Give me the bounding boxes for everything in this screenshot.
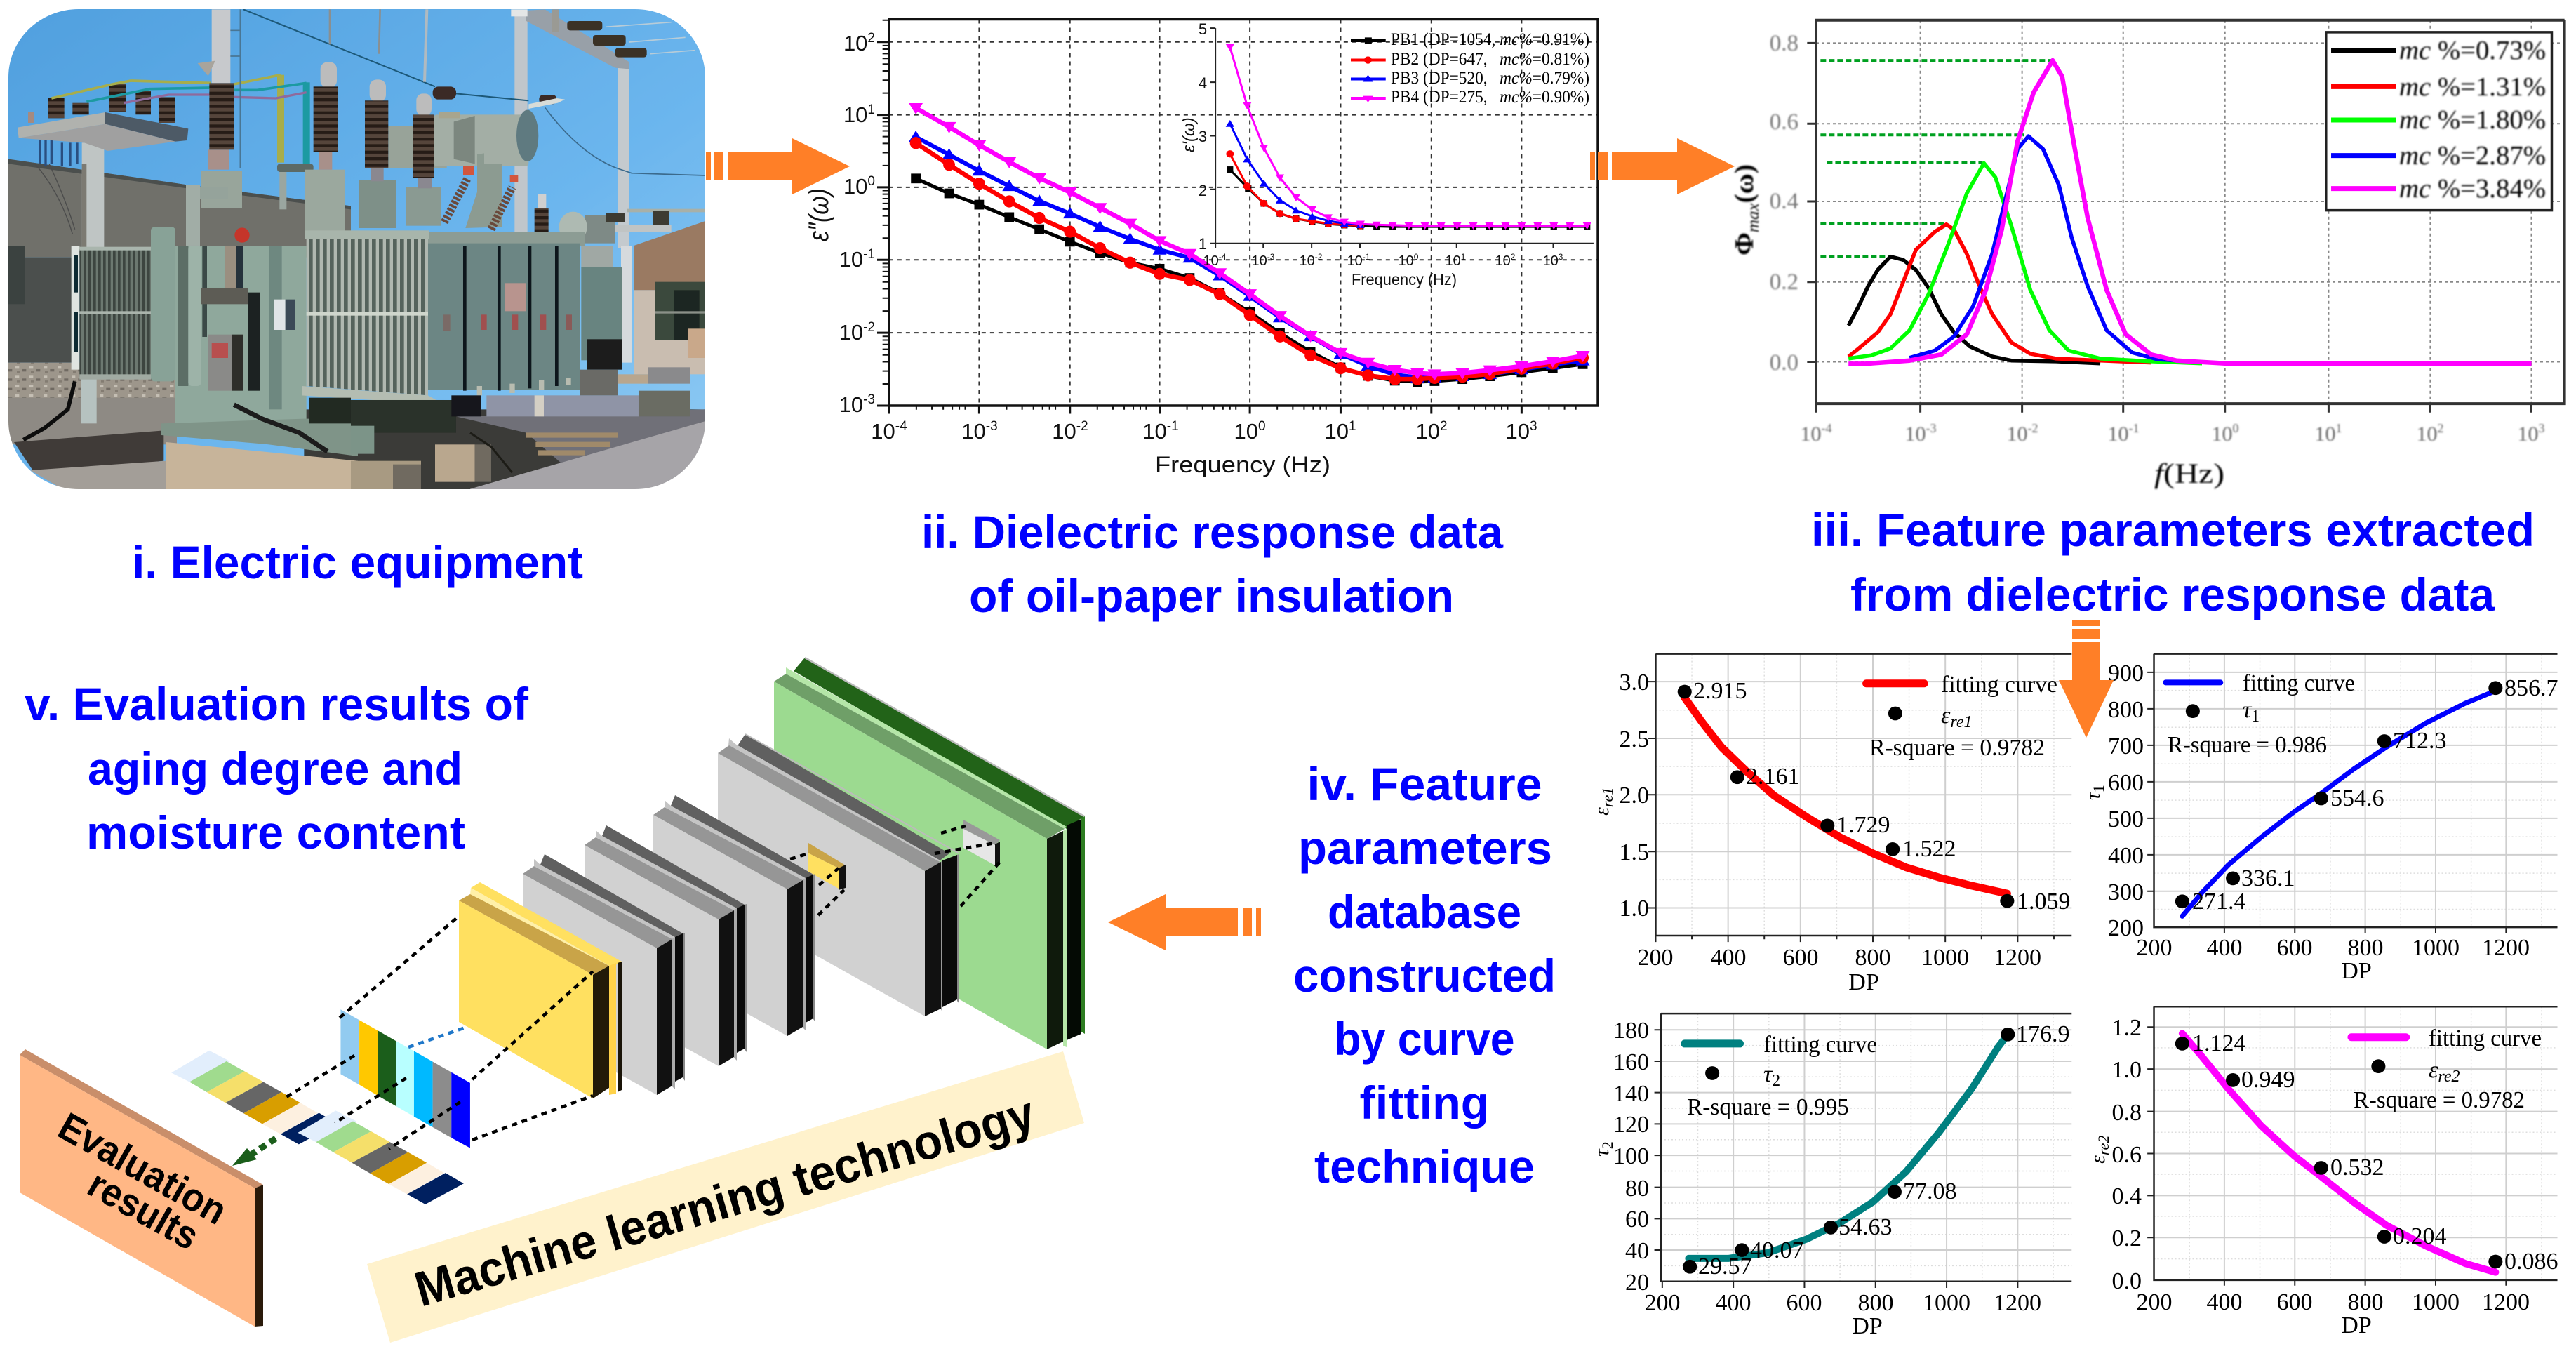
x ticks: 10 [2314, 423, 2335, 446]
chart: tau1 fit: 900 [2108, 660, 2144, 686]
radiators [72, 246, 79, 370]
inset legend: PB1 (DP=1054, mc%=0.91%) [1391, 30, 1589, 49]
chart: epsilon re1 fit: 200 [1638, 945, 1673, 971]
x ticks: 0 [2233, 421, 2238, 435]
chart: tau2 fit: 180 [1613, 1018, 1649, 1044]
chart: epsilon re2 fit [2086, 1006, 2558, 1338]
heading: iii. Feature parameters: iii. Feature parameters extracted [1811, 504, 2535, 556]
arrow: database to machine learning [1108, 894, 1261, 950]
chart: epsilon re2 fit: 0.2 [2112, 1225, 2142, 1251]
chart: tau1 fit: 856.7 [2504, 675, 2558, 701]
y axis ticks: -1 [863, 247, 875, 262]
chart: tau1 fit: 200 [2108, 915, 2144, 941]
chart: tau1 fit: 300 [2108, 879, 2144, 905]
heading: iv. Feature parameters database: constructed [1293, 950, 1556, 1002]
chart: feature parameters: f(Hz) [2154, 458, 2224, 489]
y axis ticks: 10 [839, 320, 863, 345]
chart: tau2 fit: 40 [1625, 1238, 1649, 1264]
chart: tau1 fit [2081, 654, 2558, 984]
chart: dielectric response: -4 [1219, 252, 1227, 262]
chart: dielectric response: Frequency (Hz) [1352, 270, 1457, 288]
chart: tau1 fit: DP [2341, 958, 2372, 984]
x axis ticks: 10 [871, 419, 895, 444]
chart: dielectric response: -2 [1315, 252, 1323, 262]
y ticks: 0.2 [1770, 270, 1798, 295]
chart: tau2 fit: 2 [1772, 1072, 1780, 1090]
chart: epsilon re1 fit: 400 [1711, 945, 1746, 971]
x ticks: 10 [2212, 423, 2233, 446]
heading: ii. Dielectric response data [921, 506, 1504, 622]
chart: dielectric response: 10 [1203, 253, 1219, 269]
chart: epsilon re2 fit: 600 [2276, 1289, 2313, 1315]
layer: gray plate 3 [653, 795, 815, 1036]
chart: epsilon re1 fit: 800 [1855, 945, 1890, 971]
photo: power transformer [0, 0, 711, 493]
chart: dielectric response: 0 [1414, 252, 1419, 262]
chart: epsilon re2 fit: 400 [2206, 1289, 2243, 1315]
arrow: network to evaluation results [232, 1138, 276, 1166]
chart: tau2 fit: R-square = 0.995 [1687, 1094, 1849, 1120]
y axis ticks: 0 [867, 174, 875, 189]
inset labels: 5 [1199, 20, 1207, 38]
chart: tau1 fit: 271.4 [2192, 889, 2245, 915]
chart: dielectric response: 10 [1446, 253, 1461, 269]
chart: dielectric response: ε′(ω) [1180, 117, 1199, 152]
chart: tau2 fit: 160 [1613, 1049, 1649, 1075]
chart: epsilon re2 fit: 0.532 [2330, 1155, 2384, 1181]
chart: dielectric response: 10 [1300, 253, 1315, 269]
chart: epsilon re2 fit: 0.204 [2393, 1223, 2446, 1249]
chart: tau1 fit: 800 [2348, 935, 2383, 961]
inset labels: 2 [1199, 182, 1207, 199]
chart: epsilon re1 fit: ε [1941, 703, 1950, 729]
diagram: neural network layers [171, 658, 1085, 1204]
chart: tau1 fit: 500 [2108, 806, 2144, 832]
heading: v. Evaluation results: v. Evaluation results of [25, 678, 529, 730]
x ticks: -1 [2129, 421, 2139, 435]
chart: epsilon re1 fit: fitting curve [1941, 672, 2057, 698]
legend labels [2399, 36, 2546, 204]
chart: epsilon re2 fit: R-square = 0.9782 [2354, 1087, 2525, 1113]
conservator [388, 126, 447, 168]
chart: tau1 fit: 800 [2108, 697, 2144, 723]
chart: tau2 fit: 29.57 [1698, 1254, 1751, 1279]
chart: tau2 fit: 54.63 [1838, 1214, 1892, 1240]
x ticks: 10 [2007, 423, 2028, 446]
legend labels: mc %=1.80% [2399, 105, 2546, 135]
chart: epsilon re2 fit: 1.124 [2192, 1030, 2245, 1056]
chart: epsilon re1 fit: 2.915 [1693, 678, 1747, 704]
banner: machine learning technology: Machine learning technology [408, 1085, 1041, 1317]
heading: iv. Feature parameters database: technique [1314, 1141, 1535, 1192]
chart: tau2 fit: 40.07 [1750, 1237, 1803, 1263]
chart: tau2 fit: 60 [1625, 1207, 1649, 1232]
chart: dielectric response: 10 [1399, 253, 1414, 269]
chart: epsilon re2 fit: 0.6 [2112, 1142, 2142, 1168]
y axis ticks: 10 [839, 392, 863, 417]
chart: epsilon re2 fit: ε [2086, 1155, 2109, 1164]
chart: tau2 fit: 140 [1613, 1081, 1649, 1107]
right small tank and bracket [585, 215, 615, 244]
inset labels: 4 [1199, 74, 1207, 92]
panel: evaluation results: results [81, 1162, 206, 1258]
x axis ticks: 0 [1258, 419, 1266, 434]
chart: epsilon re1 fit: 600 [1782, 945, 1819, 971]
chart: epsilon re2 fit: 0.4 [2112, 1183, 2142, 1209]
panel: evaluation results [20, 1049, 263, 1327]
chart: tau1 fit: 1000 [2412, 935, 2460, 961]
x ticks: 10 [2108, 423, 2129, 446]
dashed projection lines [283, 917, 593, 1149]
chart: feature parameters: max [1744, 203, 1763, 232]
x ticks: -4 [1822, 421, 1831, 435]
chart: tau2 fit: 1200 [1994, 1290, 2041, 1316]
chart: feature parameters [1730, 20, 2565, 489]
chart: tau1 fit: 1 [2090, 785, 2107, 792]
chart: epsilon re2 fit: re2 [2095, 1136, 2112, 1155]
chart: tau1 fit: 1200 [2482, 935, 2530, 961]
y ticks: 0.8 [1770, 31, 1798, 56]
x axis ticks: -1 [1167, 419, 1179, 434]
legend labels: mc %=0.73% [2399, 36, 2546, 65]
chart: tau1 fit: τ [2081, 792, 2104, 800]
colored wires [51, 75, 281, 98]
chart: tau1 fit: 400 [2206, 935, 2243, 961]
chart: tau2 fit: 800 [1858, 1290, 1893, 1316]
legend labels: mc %=3.84% [2399, 174, 2546, 204]
y axis ticks: 2 [867, 31, 875, 46]
chart: tau2 fit: DP [1852, 1313, 1883, 1339]
heading: iii. Feature parameters [1811, 504, 2535, 620]
chart: epsilon re1 fit: re1 [1950, 713, 1973, 731]
heading: v. Evaluation results [25, 678, 529, 858]
x axis ticks: 10 [961, 419, 986, 444]
chart: tau2 fit: 20 [1625, 1270, 1649, 1296]
left platform [82, 142, 104, 253]
chart: tau1 fit: 600 [2276, 935, 2313, 961]
chart: feature parameters: Φ [1730, 233, 1759, 255]
chart: tau2 fit [1590, 1013, 2071, 1339]
chart: tau2 fit: 100 [1613, 1143, 1649, 1169]
y ticks: 0.6 [1770, 109, 1798, 135]
y axis ticks: 10 [839, 247, 863, 272]
chart: dielectric response: 2 [1511, 252, 1516, 262]
chart: tau2 fit: 1000 [1923, 1290, 1970, 1316]
chart: epsilon re1 fit: re1 [1599, 787, 1616, 807]
heading: i. Electric equipment: i. Electric equipment [132, 536, 583, 588]
chart: tau2 fit: 80 [1625, 1176, 1649, 1202]
x axis ticks: -4 [895, 419, 907, 434]
x ticks [1801, 421, 2544, 446]
inset legend: PB3 (DP=520, mc%=0.79%) [1391, 69, 1589, 88]
x axis ticks: 10 [1415, 419, 1440, 444]
x axis ticks [871, 419, 1537, 444]
chart: dielectric response: -1 [1363, 252, 1370, 262]
inset labels: 3 [1199, 128, 1207, 145]
chart: epsilon re2 fit: 1.0 [2112, 1057, 2142, 1083]
y ticks: 0.4 [1770, 189, 1798, 214]
x axis ticks: -2 [1076, 419, 1088, 434]
chart: tau1 fit: τ [2243, 697, 2251, 723]
x ticks: 2 [2438, 421, 2443, 435]
tank body [428, 232, 585, 246]
heading: iv. Feature parameters database: iv. Feature [1307, 758, 1542, 810]
chart: epsilon re1 fit: 1.0 [1620, 896, 1649, 922]
colored feature strip [340, 1009, 470, 1148]
x ticks: -3 [1926, 421, 1937, 435]
chart: tau2 fit: 400 [1715, 1290, 1751, 1316]
y axis ticks [839, 31, 875, 417]
x ticks: 1 [2335, 421, 2342, 435]
tank bases [186, 185, 200, 253]
y axis ticks: 10 [843, 31, 867, 55]
y axis ticks: 10 [843, 102, 867, 127]
chart: tau2 fit: 200 [1645, 1290, 1680, 1316]
chart: epsilon re1 fit: 2.0 [1620, 783, 1649, 809]
inset legend [1391, 30, 1589, 107]
layer: gray plate 2 [585, 825, 747, 1066]
x ticks: -2 [2028, 421, 2038, 435]
chart: tau2 fit: τ [1590, 1149, 1613, 1157]
y axis ticks: 10 [843, 174, 867, 199]
inset labels: 1 [1199, 235, 1207, 253]
inset legend: PB2 (DP=647, mc%=0.81%) [1391, 50, 1589, 69]
chart: dielectric response: 10 [1252, 253, 1267, 269]
chart: dielectric response: 10 [1495, 253, 1511, 269]
heading: iv. Feature parameters database [1293, 758, 1556, 1192]
x ticks: 10 [1904, 423, 1926, 446]
layer: gray plate 4 [718, 734, 959, 1016]
chart: dielectric response: -3 [1267, 252, 1275, 262]
chart: dielectric response: ε″(ω) [803, 188, 834, 241]
flattened strip B [298, 1110, 464, 1204]
layer: gray plate 1 [523, 854, 685, 1095]
heading: iv. Feature parameters database: by curve [1335, 1013, 1514, 1065]
window on green plate [963, 820, 1000, 865]
chart: epsilon re1 fit: DP [1848, 969, 1879, 995]
chart: epsilon re1 fit [1590, 654, 2071, 995]
chart: epsilon re2 fit: fitting curve [2429, 1025, 2542, 1051]
heading: ii. Dielectric response data: of oil-paper insulation [969, 570, 1454, 622]
chart: tau1 fit: 554.6 [2330, 785, 2384, 811]
chart: epsilon re2 fit: 0.086 [2504, 1249, 2558, 1275]
x axis ticks: 10 [1234, 419, 1258, 444]
inset [1210, 28, 1594, 248]
chart: epsilon re1 fit: 2.5 [1620, 726, 1649, 752]
layer: green output plate [774, 658, 1085, 1049]
y axis ticks: -2 [863, 320, 875, 335]
chart: tau1 fit: 700 [2108, 733, 2144, 759]
heading: iii. Feature parameters: from dielectric response data [1850, 569, 2495, 620]
chart: epsilon re2 fit: 0.949 [2241, 1067, 2295, 1093]
chart: tau2 fit: 77.08 [1903, 1178, 1956, 1204]
inset labels [1199, 20, 1207, 253]
chart: epsilon re2 fit: 1000 [2412, 1289, 2460, 1315]
center pole [212, 9, 230, 83]
chart: epsilon re2 fit: 1200 [2482, 1289, 2530, 1315]
layer: yellow plate [459, 882, 622, 1098]
x ticks: 10 [1801, 423, 1822, 446]
chart: epsilon re2 fit: ε [2429, 1057, 2438, 1083]
chart: tau1 fit: 336.1 [2241, 865, 2295, 891]
chart: tau2 fit: 600 [1787, 1290, 1822, 1316]
heading: ii. Dielectric response data: ii. Dielectric response data [921, 506, 1504, 558]
chart: epsilon re1 fit: 1.729 [1836, 812, 1890, 838]
chart: dielectric response: 3 [1559, 252, 1563, 262]
chart: epsilon re2 fit: DP [2341, 1312, 2372, 1338]
panel: evaluation results: Evaluation [51, 1104, 234, 1233]
chart: dielectric response [803, 20, 1598, 477]
dashed links between windows [790, 826, 999, 915]
legend lines [1351, 39, 1386, 42]
x axis ticks: 3 [1530, 419, 1537, 434]
chart: dielectric response: 1 [1461, 252, 1466, 262]
y ticks: 0.0 [1770, 350, 1798, 375]
x axis ticks: 10 [1052, 419, 1076, 444]
chart: tau1 fit: 1 [2251, 707, 2260, 726]
chart: dielectric response: Frequency (Hz) [1155, 452, 1330, 477]
heading: v. Evaluation results: aging degree and [88, 743, 462, 795]
chart: epsilon re1 fit: 1.5 [1620, 839, 1649, 865]
chart: epsilon re1 fit: 1000 [1921, 945, 1969, 971]
chart: tau1 fit: R-square = 0.986 [2168, 732, 2327, 758]
chart: tau1 fit: 712.3 [2393, 728, 2446, 754]
x axis ticks: -3 [986, 419, 998, 434]
chart: feature parameters: (ω) [1730, 164, 1759, 203]
under-structure [161, 419, 358, 456]
chart: tau1 fit: fitting curve [2243, 670, 2355, 696]
heading: iv. Feature parameters database: fitting [1360, 1077, 1489, 1129]
chart: epsilon re2 fit: 0.8 [2112, 1100, 2142, 1126]
arrow: equipment to dielectric data [706, 138, 850, 194]
guide lines [1820, 60, 2053, 257]
legend labels: mc %=1.31% [2399, 72, 2546, 102]
x axis ticks: 10 [1324, 419, 1349, 444]
chart: dielectric response: 10 [1347, 253, 1363, 269]
chart: epsilon re1 fit: ε [1590, 807, 1613, 816]
heading: iv. Feature parameters database: database [1328, 886, 1521, 938]
chart: epsilon re1 fit: 3.0 [1620, 670, 1649, 696]
chart: epsilon re2 fit: re2 [2438, 1068, 2460, 1086]
chart: epsilon re1 fit: R-square = 0.9782 [1869, 735, 2045, 761]
legend labels: mc %=2.87% [2399, 141, 2546, 171]
main series [916, 178, 1583, 382]
chart: tau1 fit: 400 [2108, 843, 2144, 869]
flattened strip A [171, 1051, 338, 1144]
chart: tau2 fit: 176.9 [2016, 1021, 2070, 1047]
chart: epsilon re1 fit: 1200 [1994, 945, 2041, 971]
x ticks: 10 [2417, 423, 2438, 446]
inset legend: PB4 (DP=275, mc%=0.90%) [1391, 88, 1589, 107]
y ticks [1770, 31, 1798, 375]
window on gray plate [808, 843, 846, 890]
chart: epsilon re1 fit: 2.161 [1746, 764, 1799, 790]
chart: epsilon re2 fit: 1.2 [2112, 1015, 2142, 1041]
chart: tau2 fit: τ [1763, 1061, 1772, 1087]
chart: tau1 fit: 200 [2136, 935, 2173, 961]
chart: epsilon re1 fit: 1.522 [1902, 836, 1956, 862]
chart: epsilon re1 fit: 1.059 [2017, 889, 2070, 915]
arrow: dielectric data to features [1590, 138, 1735, 194]
heading: v. Evaluation results: moisture content [86, 806, 465, 858]
chart: epsilon re2 fit: 200 [2136, 1289, 2173, 1315]
x ticks: 3 [2539, 421, 2544, 435]
y axis ticks: -3 [863, 392, 875, 407]
chart: tau2 fit: 2 [1599, 1141, 1616, 1149]
x axis ticks: 1 [1349, 419, 1356, 434]
x axis ticks: 10 [1142, 419, 1167, 444]
chart: epsilon re2 fit: 800 [2348, 1289, 2383, 1315]
x ticks: 10 [2518, 423, 2539, 446]
chart: epsilon re2 fit: 0.0 [2112, 1268, 2142, 1294]
x axis ticks: 10 [1505, 419, 1530, 444]
x axis ticks: 2 [1440, 419, 1448, 434]
y axis ticks: 1 [867, 102, 875, 117]
chart: dielectric response: 10 [1543, 253, 1559, 269]
arrow: features to curve fits [2059, 620, 2114, 738]
bushings [321, 62, 337, 88]
chart: tau2 fit: fitting curve [1763, 1032, 1877, 1058]
heading: iv. Feature parameters database: parameters [1298, 822, 1552, 874]
poles and crossarm [514, 14, 528, 239]
chart: tau2 fit: 120 [1613, 1112, 1649, 1138]
chart: tau1 fit: 600 [2108, 770, 2144, 796]
